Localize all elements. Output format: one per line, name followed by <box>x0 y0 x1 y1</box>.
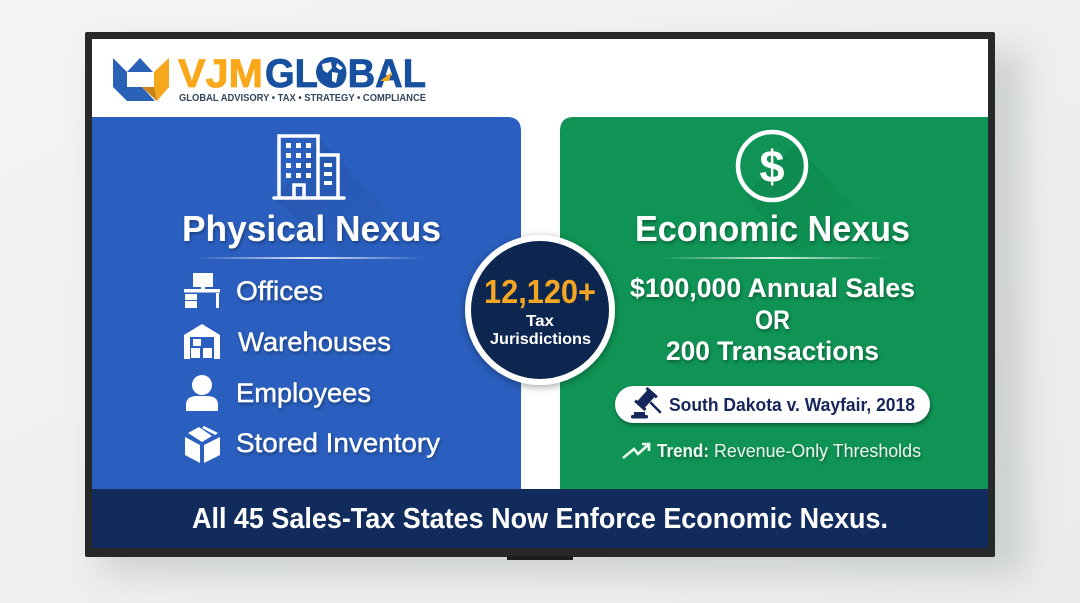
icon: person <box>186 375 218 411</box>
icon: dollar coin: $ <box>759 141 785 192</box>
logo globe <box>316 57 346 87</box>
label: Stored Inventory <box>236 428 440 458</box>
icon: warehouse <box>184 324 220 359</box>
list item: warehouses <box>184 324 391 359</box>
threshold text: $100,000 Annual Sales <box>630 273 915 303</box>
panel: physical nexus <box>92 117 521 489</box>
tv shadow <box>100 50 1025 575</box>
badge label: Jurisdictions <box>490 331 591 348</box>
logo wordmark GLOBAL: GLOBAL <box>265 52 426 96</box>
divider <box>660 257 888 259</box>
label: Trend: <box>657 441 709 461</box>
logo wordmark VJM: VJM <box>178 52 263 96</box>
list item: offices <box>184 273 323 308</box>
divider <box>195 257 425 259</box>
tv frame <box>85 32 995 560</box>
icon: gavel <box>631 387 660 418</box>
logo accent <box>380 72 392 81</box>
logo tagline: GLOBAL ADVISORY • TAX • STRATEGY • COMPLIANCE <box>179 93 426 104</box>
pill: court case <box>615 386 930 423</box>
badge label <box>490 313 591 348</box>
badge label: Tax <box>526 313 554 330</box>
icon: box <box>185 426 220 463</box>
heading: economic nexus: Economic Nexus <box>635 208 910 249</box>
icon: desk <box>184 273 220 308</box>
label: Revenue-Only Thresholds <box>714 441 921 461</box>
label: Employees <box>236 378 371 408</box>
heading: physical nexus: Physical Nexus <box>182 208 441 249</box>
label: South Dakota v. Wayfair, 2018 <box>669 395 915 415</box>
label: Offices <box>236 276 323 306</box>
panel: economic nexus <box>560 117 988 489</box>
threshold text: OR <box>755 305 790 335</box>
logo icon <box>113 58 169 101</box>
icon shadow <box>275 140 400 260</box>
trend line <box>623 441 921 461</box>
icon: dollar coin <box>738 132 806 200</box>
icon shadow <box>745 145 860 260</box>
list item: stored inventory <box>185 426 440 463</box>
label: Warehouses <box>238 327 391 357</box>
badge number: 12,120+ <box>484 273 596 310</box>
logo <box>113 52 426 104</box>
threshold text: 200 Transactions <box>666 336 879 366</box>
icon: building <box>274 136 344 198</box>
banner text: All 45 Sales-Tax States Now Enforce Economic Nexus. <box>192 503 888 535</box>
screen <box>92 39 988 548</box>
bottom banner <box>92 489 988 548</box>
threshold text <box>630 273 915 366</box>
center badge <box>468 238 612 382</box>
icon: trend arrow <box>623 444 649 458</box>
list item: employees <box>186 375 371 411</box>
